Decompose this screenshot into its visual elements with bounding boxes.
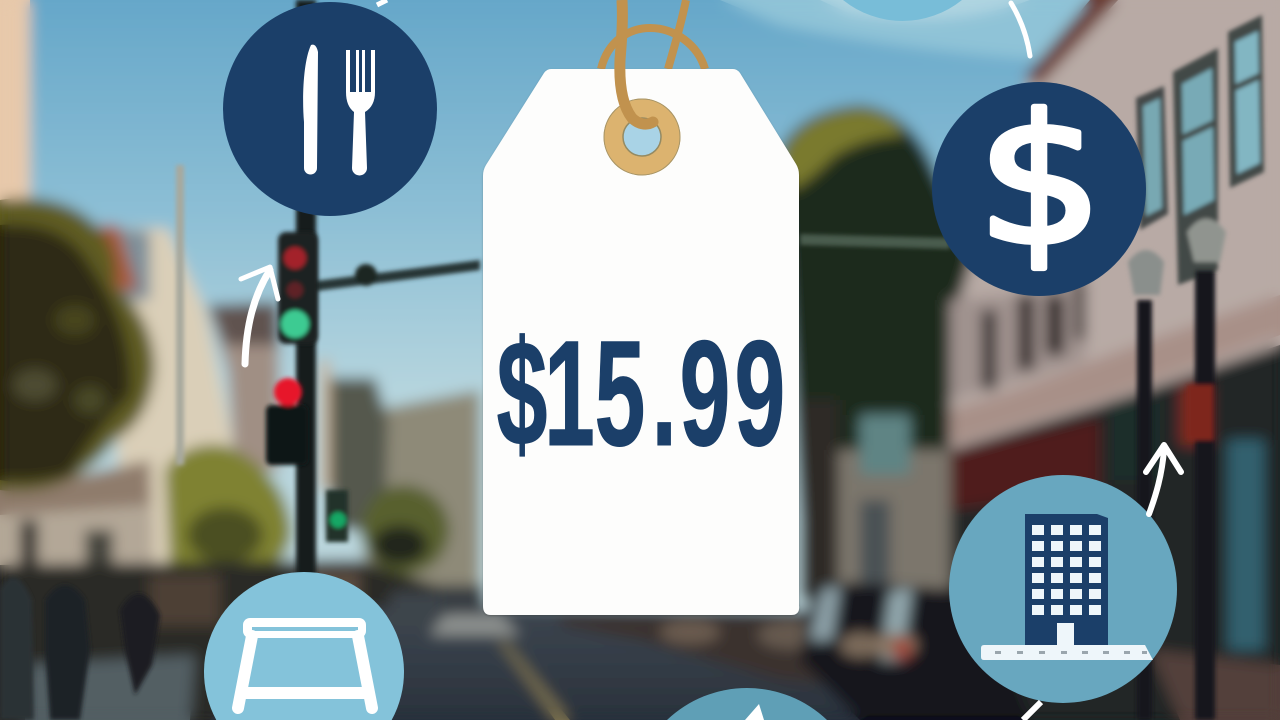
icon: knife and fork circle [223, 2, 437, 216]
price text: $15.99 [497, 311, 785, 478]
arrow: top left curve [377, 0, 387, 5]
arrow: top right curve [1011, 3, 1030, 56]
icon: partial circle top [843, 0, 962, 21]
string behind tag [601, 0, 705, 69]
icon: partial circle bottom [667, 688, 827, 720]
left buildings [0, 0, 30, 200]
near parked cars [800, 582, 1030, 720]
icon: dollar circle: $ [977, 77, 1103, 284]
lamp posts [1137, 300, 1152, 720]
second left tree [165, 444, 292, 575]
left tree [0, 198, 155, 491]
grommet and string loop [604, 60, 680, 175]
icon: dollar circle [932, 77, 1146, 296]
arrow: to knife and fork [241, 267, 278, 364]
awning and shop fronts [950, 295, 1280, 445]
right building wall [950, 0, 1280, 500]
arrow: bottom right curve [1023, 702, 1041, 720]
far parked cars [560, 616, 870, 690]
arrow: to office building [1146, 445, 1181, 514]
road marking [498, 640, 570, 720]
distant hill and trees [360, 390, 480, 610]
upper windows [1136, 86, 1168, 230]
right-centre tree [780, 105, 985, 520]
price tag [483, 69, 799, 615]
traffic signals [266, 232, 348, 542]
poles and arms [296, 0, 316, 580]
people [45, 585, 90, 720]
icon: table circle [204, 572, 404, 720]
dark upper windows under dollar [1018, 295, 1034, 370]
icon: office building circle [949, 475, 1177, 703]
road and sidewalk [0, 580, 1000, 720]
